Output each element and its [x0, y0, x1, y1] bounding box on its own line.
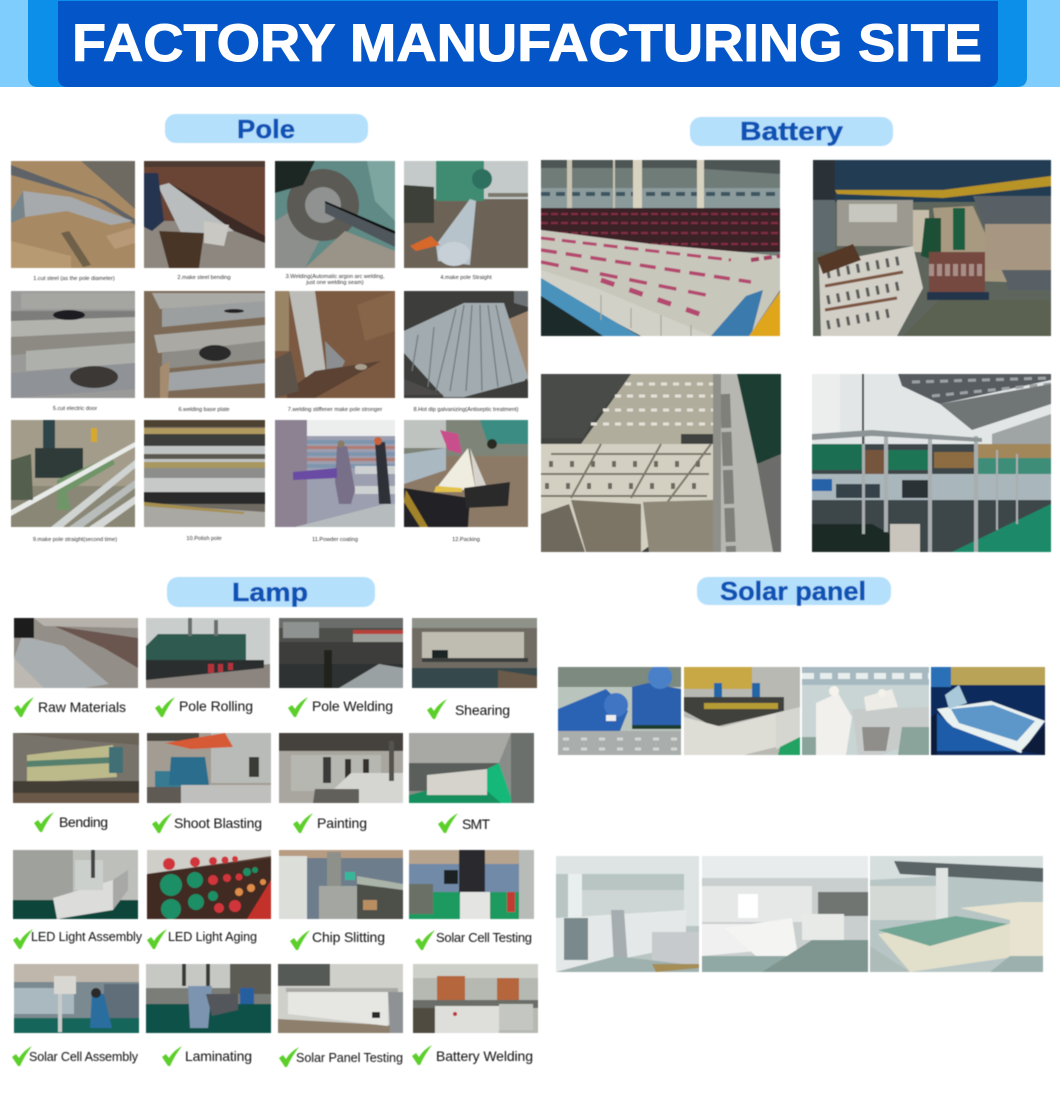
photo: battery tops [540, 373, 782, 553]
label: solar panel testing: Solar Panel Testing [296, 1051, 403, 1065]
caption: just one welding seam) [305, 280, 364, 286]
caption: 12.Packing [452, 537, 480, 543]
photo: laminating [145, 963, 272, 1034]
label: solar cell assembly [12, 1046, 139, 1066]
heading: solar panel: Solar panel [720, 576, 866, 606]
label: solar panel testing [279, 1047, 403, 1067]
label: shoot blasting [152, 813, 262, 833]
photo: solar panel testing [277, 963, 404, 1034]
label: pole rolling: Pole Rolling [179, 698, 253, 714]
heading: pole: Pole [237, 114, 295, 144]
label: shearing [427, 699, 510, 719]
label: solar cell testing: Solar Cell Testing [436, 930, 532, 945]
caption: 10.Polish pole [186, 536, 222, 542]
label: shoot blasting: Shoot Blasting [174, 815, 262, 831]
caption: 1.cut steel (as the pole diameter) [33, 276, 115, 282]
label: pole rolling [155, 697, 253, 717]
photo: welding [274, 160, 396, 269]
photo: hot dip galvanizing [403, 290, 529, 399]
label: pole welding: Pole Welding [312, 698, 393, 714]
photo: pole welding [278, 617, 404, 689]
caption: 7.welding stiffener make pole stronger [288, 407, 382, 413]
label: bending [34, 812, 108, 832]
label: SMT: SMT [462, 816, 490, 832]
photo: shearing [411, 617, 538, 689]
photo: steel bending [143, 160, 266, 269]
photo: welding base plate [143, 290, 266, 399]
photo: shoot blasting [146, 732, 272, 804]
photo: straighten pole [403, 160, 529, 269]
caption: 5.cut electric door [53, 406, 97, 412]
photo: LED light aging [146, 850, 272, 920]
label: LED light assembly: LED Light Assembly [31, 930, 143, 944]
photo: battery rows [540, 159, 781, 337]
heading: pole [165, 114, 368, 144]
label: battery welding [412, 1045, 533, 1065]
caption: 4.make pole Straight [440, 275, 492, 281]
photo: polish pole [143, 419, 266, 528]
photo: packing [403, 419, 529, 528]
heading: battery: Battery [740, 116, 844, 146]
panel: pole [11, 114, 528, 543]
label: LED light assembly [13, 929, 143, 949]
photo: storage hall [556, 856, 700, 973]
heading: lamp [167, 577, 375, 607]
title: FACTORY MANUFACTURING SITE [72, 14, 982, 73]
photo: powder coating [274, 419, 396, 528]
label: solar cell assembly: Solar Cell Assembly [29, 1050, 139, 1064]
label: laminating [162, 1046, 252, 1066]
photo: cut electric door [10, 290, 136, 399]
caption: 11.Powder coating [312, 537, 358, 543]
panel: solar panel [556, 576, 1045, 972]
label: raw materials: Raw Materials [38, 699, 126, 715]
label: painting [293, 813, 367, 833]
photo: glowing panel [930, 666, 1046, 756]
photo: LED light assembly [12, 849, 139, 920]
photo: white boxes [701, 856, 869, 973]
label: laminating: Laminating [185, 1048, 252, 1064]
caption: 2.make steel bending [177, 275, 231, 281]
photo: assembly line [811, 373, 1052, 553]
photo: battery welding [412, 964, 539, 1034]
photo: straighten second time [10, 419, 136, 528]
header banner [0, 0, 1060, 87]
caption: 8.Hot dip galvanizing(Antiseptic treatment) [413, 407, 519, 413]
photo: battery stacks [812, 159, 1052, 337]
heading: battery [690, 116, 893, 146]
panel: battery [541, 116, 1051, 552]
label: pole welding [288, 697, 393, 717]
photo: welding stiffener [274, 290, 396, 399]
caption: 9.make pole straight(second time) [33, 537, 117, 543]
label: solar cell testing [415, 930, 532, 950]
photo: laminating machine [870, 856, 1044, 972]
panel: lamp [12, 577, 538, 1067]
photo: solar cell testing [408, 849, 534, 920]
caption: 3.Welding(Automatic argon arc welding, [286, 274, 385, 280]
label: painting: Painting [317, 815, 367, 831]
caption: 6.welding base plate [178, 407, 230, 413]
heading: lamp: Lamp [232, 577, 308, 607]
photo: workers in white [801, 666, 930, 756]
label: battery welding: Battery Welding [436, 1048, 533, 1064]
photo: cut steel [10, 160, 136, 269]
label: chip slitting [290, 929, 385, 950]
photo: solar machine [683, 666, 801, 756]
photo: painting [278, 732, 404, 804]
photo: SMT [408, 732, 535, 804]
photo: solar cell assembly [13, 964, 140, 1034]
label: SMT [438, 813, 490, 833]
label: LED light aging [147, 929, 257, 949]
photo: workers in blue [557, 666, 682, 756]
photo: chip slitting [278, 849, 404, 920]
label: chip slitting: Chip Slitting [312, 929, 385, 945]
label: bending: Bending [59, 814, 108, 830]
label: LED light aging: LED Light Aging [168, 930, 257, 944]
photo: pole rolling [145, 617, 271, 689]
photo: raw materials [13, 617, 139, 689]
label: shearing: Shearing [455, 702, 510, 718]
photo: bending [12, 732, 140, 804]
label: raw materials [14, 697, 126, 717]
